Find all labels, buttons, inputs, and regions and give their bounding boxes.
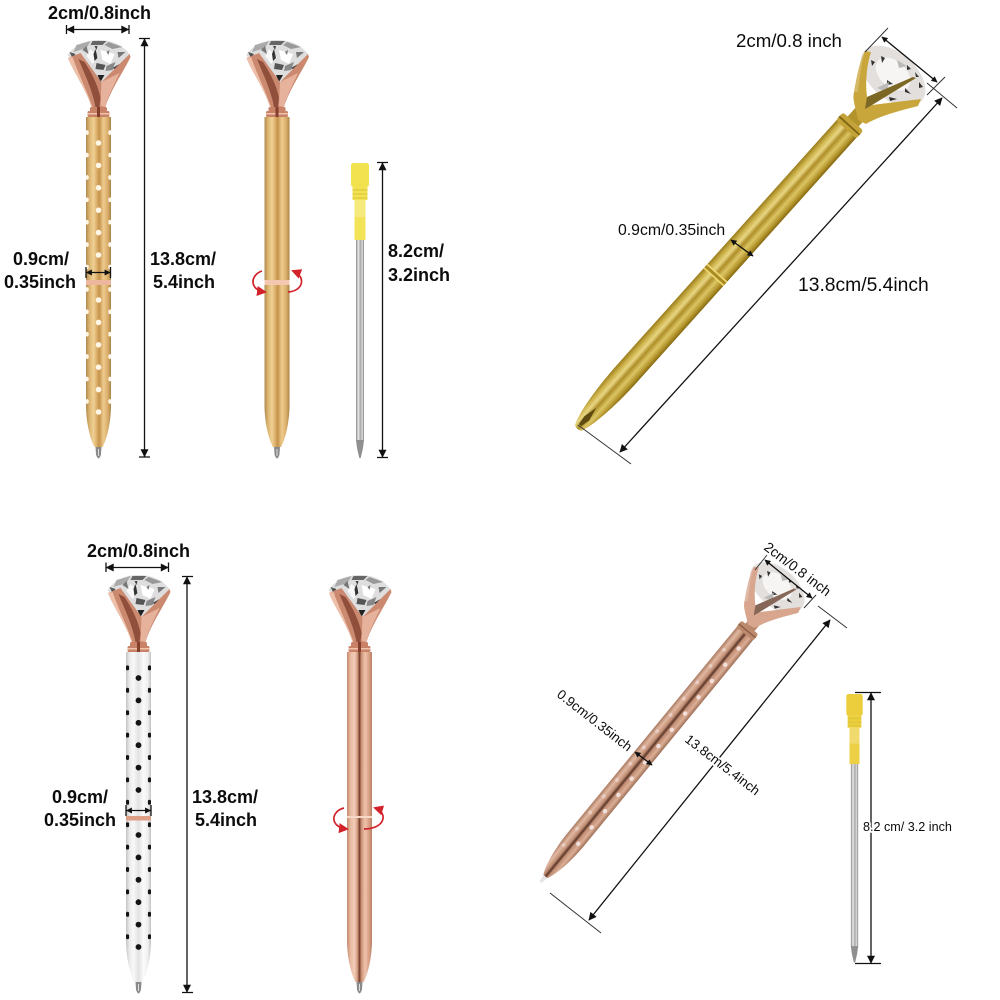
- pen: angled rose gold dotted: [532, 552, 814, 889]
- dimension: angled rose length: 13.8cm/5.4inch: [682, 731, 763, 798]
- dimension: gold dotted pen head width: [48, 3, 151, 34]
- dimension: upper refill length: 8.2cm/: [388, 241, 444, 261]
- dimension: angled rose length: [550, 606, 847, 933]
- pen: plain rose gold: [328, 575, 392, 994]
- dimension: angled gold head width: 2cm/0.8 inch: [736, 30, 842, 51]
- dimension: lower refill length: [855, 692, 952, 964]
- dimension: gold dotted pen body width: 0.9cm/: [13, 249, 69, 269]
- dimension: upper refill length: [377, 162, 450, 458]
- dimension: angled gold head width: [736, 28, 945, 95]
- icon: red twist arrows, gold pen: [253, 271, 302, 292]
- dimension: gold dotted pen body width: [4, 249, 110, 292]
- refill: yellow cap, upper row: [351, 163, 369, 458]
- dimension: angled gold body width: 0.9cm/0.35inch: [618, 222, 725, 239]
- refill: amber cap, lower row: [846, 694, 863, 962]
- icon: red twist arrows, rose pen: [334, 808, 383, 829]
- dimension: gold dotted pen height: 13.8cm/: [150, 249, 216, 269]
- dimension: white pen body width: [44, 787, 151, 830]
- dimension: white pen body width: 0.35inch: [44, 810, 116, 830]
- dimension: angled gold body width: [618, 222, 753, 256]
- dimension: angled gold length: 13.8cm/5.4inch: [798, 275, 929, 296]
- dimension: gold dotted pen head width: 2cm/0.8inch: [48, 3, 151, 23]
- dimension: white pen height: [182, 576, 258, 992]
- pen: angled gold: [567, 34, 937, 438]
- dimension: lower refill length: 8.2 cm/ 3.2 inch: [863, 820, 952, 834]
- dimension: gold dotted pen height: 5.4inch: [153, 272, 215, 292]
- pen: gold dotted: [68, 40, 130, 458]
- dimension: white pen body width: 0.9cm/: [52, 787, 108, 807]
- dimension: white pen head width: [87, 541, 190, 572]
- dimension: angled gold length: [578, 83, 957, 464]
- dimension: white pen height: 5.4inch: [195, 810, 257, 830]
- dimension: white pen head width: 2cm/0.8inch: [87, 541, 190, 561]
- dimension: angled rose body width: 0.9cm/0.35inch: [554, 687, 635, 754]
- pen: white with black dots: [108, 575, 170, 994]
- dimension: angled rose head width: 2cm/0.8 inch: [761, 539, 834, 599]
- dimension: white pen height: 13.8cm/: [192, 787, 258, 807]
- dimension: gold dotted pen height: [139, 38, 216, 457]
- pen: plain gold: [246, 40, 309, 458]
- dimension: gold dotted pen body width: 0.35inch: [4, 272, 76, 292]
- dimension: upper refill length: 3.2inch: [388, 265, 450, 285]
